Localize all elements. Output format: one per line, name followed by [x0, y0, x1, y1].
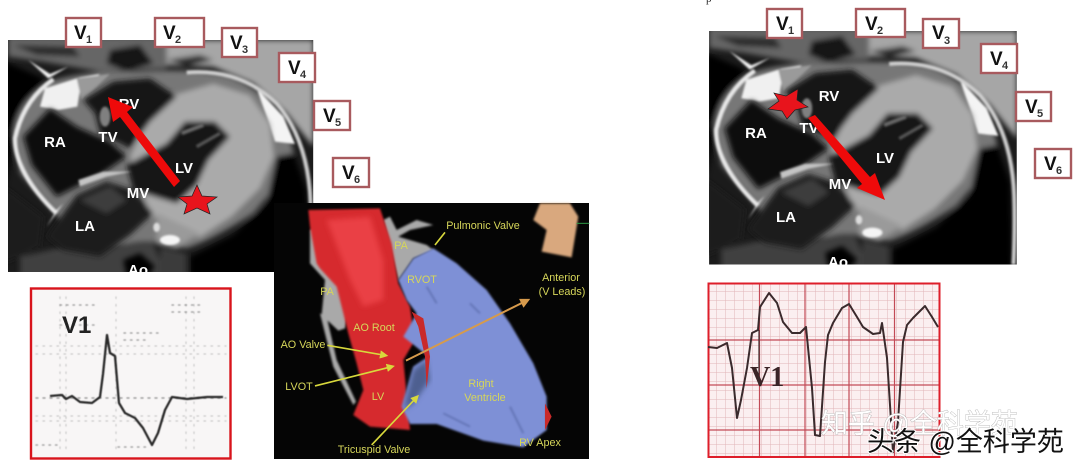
chamber labels: LV	[876, 150, 894, 167]
red strip and apex	[412, 312, 430, 388]
chamber labels: LA	[776, 209, 796, 226]
lead labels: right V1 to V6: 6	[1056, 165, 1062, 177]
panel: left V1 ECG strip	[31, 288, 230, 458]
lead labels: right V1 to V6: V	[776, 14, 789, 35]
lead labels: left V1 to V6: 4	[300, 69, 307, 81]
ECG label V1: V1	[750, 362, 784, 393]
chamber labels: RV	[819, 88, 839, 105]
lead labels: left V1 to V6: V	[288, 58, 301, 79]
ECG label V1: V1	[62, 312, 91, 339]
chamber labels: LA	[75, 218, 95, 235]
panel: left MRI four-chamber view	[5, 37, 313, 279]
lead labels: left V1 to V6: 2	[175, 34, 181, 46]
lead labels: left V1 to V6: 5	[335, 117, 341, 129]
heart labels	[281, 220, 585, 456]
lead labels: left V1 to V6: V	[230, 33, 243, 54]
lead labels: left V1 to V6: V	[323, 106, 336, 127]
yellow pointer arrows	[315, 232, 445, 445]
lead labels: right V1 to V6: V	[990, 49, 1003, 70]
lead labels: left V1 to V6: V	[74, 23, 87, 44]
lead labels: right V1 to V6: 2	[877, 25, 883, 37]
heart labels: PA	[320, 286, 335, 298]
lead labels: right V1 to V6: 1	[788, 25, 794, 37]
lead labels: left V1 to V6	[66, 18, 369, 187]
mask: clip Ao text on right panel	[709, 264, 1019, 282]
ECG frame	[31, 288, 230, 458]
ECG paper	[708, 283, 939, 457]
heart labels: RVOT	[407, 274, 437, 286]
heart labels: Anterior	[542, 272, 580, 284]
heart labels: Tricuspid Valve	[338, 444, 410, 456]
lead labels: right V1 to V6: V	[932, 23, 945, 44]
ECG trace	[708, 293, 938, 452]
heart labels: Right	[468, 378, 494, 390]
vertical stem of trace near label	[758, 330, 760, 385]
heart labels: Ventricle	[464, 392, 506, 404]
chamber labels: TV	[98, 129, 118, 146]
heart labels: AO Valve	[281, 339, 325, 351]
heart labels: LVOT	[285, 381, 313, 393]
heart labels: Pulmonic Valve	[446, 220, 520, 232]
chamber labels: Ao	[128, 262, 148, 279]
heart model, scaled from crop coordinates	[308, 203, 589, 447]
lead labels: right V1 to V6: 4	[1002, 60, 1009, 72]
ECG grid	[708, 283, 939, 457]
icon: red star	[768, 89, 808, 119]
pulmonary artery (grey)	[310, 217, 433, 405]
right ventricle (blue)	[398, 248, 547, 447]
chamber labels: TV	[799, 120, 819, 137]
heart labels: AO Root	[353, 322, 395, 334]
chamber labels: RA	[745, 125, 767, 142]
lead labels: right V1 to V6: 5	[1037, 108, 1043, 120]
ECG frame	[708, 284, 940, 457]
ECG trace	[50, 335, 223, 445]
lead labels: left V1 to V6: 6	[354, 174, 360, 186]
lead labels: left V1 to V6: 3	[242, 44, 248, 56]
chamber labels: MV	[829, 176, 851, 193]
arrow: red arrow toward lateral wall	[808, 115, 885, 200]
MRI image	[706, 28, 1017, 270]
panel: right MRI four-chamber view	[706, 28, 1017, 271]
icon: red star	[178, 185, 217, 214]
watermark: Zhihu: 知乎 @全科学苑	[821, 409, 1018, 439]
aorta and left ventricle (red)	[308, 208, 415, 430]
lead labels: right V1 to V6: 3	[944, 35, 950, 47]
chamber labels	[44, 96, 193, 279]
lead labels: right V1 to V6	[767, 9, 1071, 178]
arrow: red activation arrow toward V1	[108, 97, 180, 187]
arrow: anterior orange arrow	[406, 301, 527, 361]
chamber labels: RA	[44, 134, 66, 151]
black background	[274, 203, 589, 459]
watermark: Toutiao: 头条 @全科学苑	[867, 427, 1064, 457]
heart labels: RV Apex	[519, 437, 562, 449]
lead labels: left V1 to V6: V	[342, 163, 355, 184]
chamber labels: MV	[127, 185, 149, 202]
heart labels: PA	[394, 240, 409, 252]
chamber labels: LV	[175, 160, 193, 177]
heart labels: LV	[372, 391, 385, 403]
lead labels: right V1 to V6: V	[865, 14, 878, 35]
chamber labels	[745, 88, 894, 271]
chamber labels: Ao	[828, 254, 848, 271]
lead labels: left V1 to V6: V	[163, 23, 176, 44]
torso orientation icon	[533, 203, 578, 257]
lead labels: right V1 to V6: V	[1044, 154, 1057, 175]
mask: white below left MRI	[0, 272, 274, 468]
ECG major lines	[708, 283, 939, 457]
lead labels: left V1 to V6: 1	[86, 34, 92, 46]
panel: 3D heart electroanatomic map	[274, 203, 589, 459]
panel: right V1 ECG strip	[708, 283, 940, 457]
heart labels: (V Leads)	[539, 286, 585, 298]
chamber labels: RV	[119, 96, 139, 113]
MRI image	[5, 37, 313, 277]
ECG dotted grid	[36, 297, 226, 450]
lead labels: right V1 to V6: V	[1025, 97, 1038, 118]
